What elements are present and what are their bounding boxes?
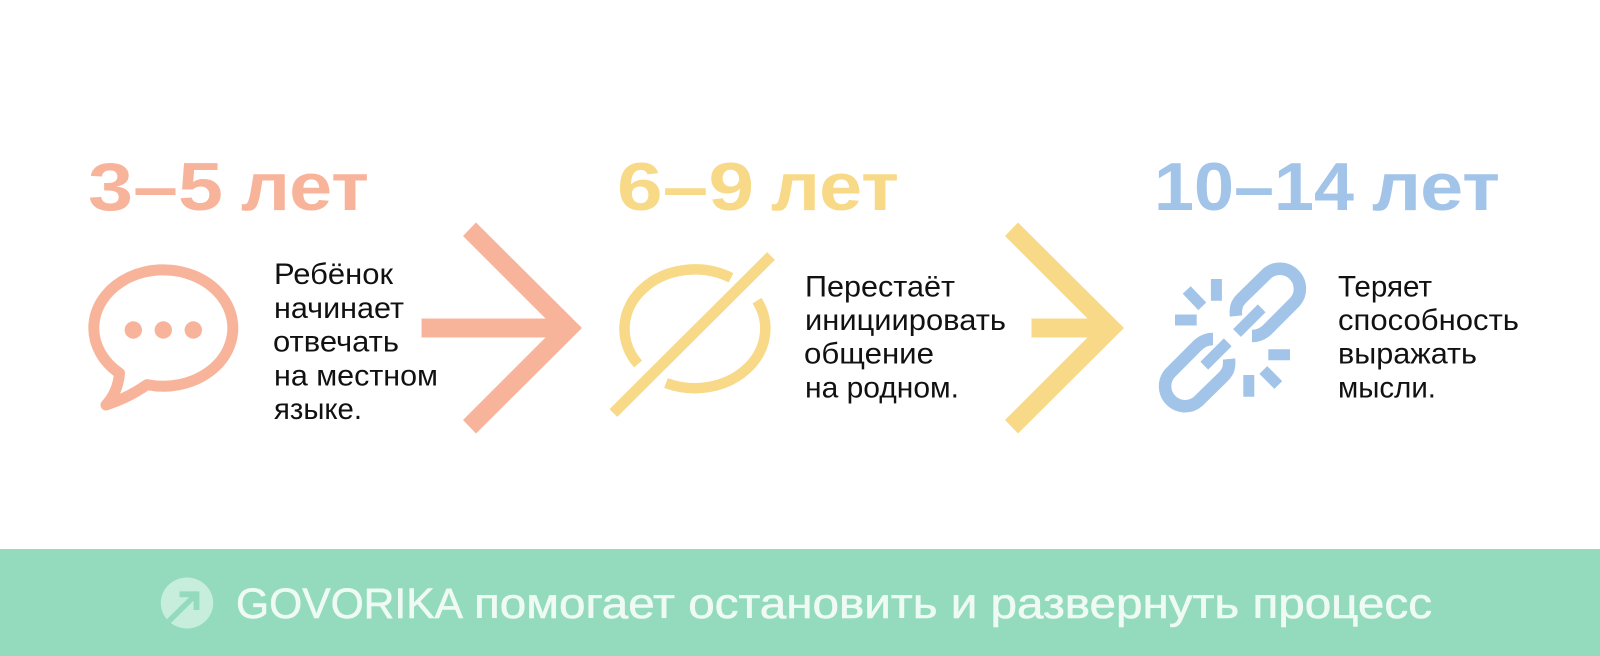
banner text: помогает остановить и развернуть процесс xyxy=(474,580,1432,628)
heading: 10-14 years: 10–14 xyxy=(1154,149,1354,225)
arrow: salmon xyxy=(422,222,582,434)
banner xyxy=(0,549,1600,656)
banner text: GOVORIKA xyxy=(236,580,463,628)
heading: 6-9 years: 6–9 xyxy=(617,149,754,225)
text block: loses ability: мысли. xyxy=(1338,372,1436,404)
text block: child starts answering xyxy=(273,258,438,426)
panel: 6-9 years xyxy=(613,149,1006,413)
text block: loses ability: способность xyxy=(1338,304,1519,337)
text block: loses ability xyxy=(1338,270,1519,404)
heading: 10-14 years: лет xyxy=(1372,149,1500,225)
text block: stops initiating: на родном. xyxy=(805,372,959,404)
icon: speech bubble xyxy=(94,270,233,405)
panel: 3-5 years xyxy=(88,149,438,426)
heading: 3-5 years xyxy=(88,149,369,225)
text block: loses ability: Теряет xyxy=(1338,270,1432,304)
icon: arrow in circle xyxy=(161,578,213,628)
text block: child starts answering: на местном xyxy=(274,360,438,392)
heading: 3-5 years: 3–5 xyxy=(88,149,223,225)
icon: broken chain xyxy=(1165,269,1300,406)
text block: stops initiating: инициировать xyxy=(805,304,1006,337)
panel: 10-14 years xyxy=(1154,149,1519,406)
arrow: yellow xyxy=(1005,222,1124,434)
heading: 6-9 years xyxy=(617,149,899,225)
heading: 10-14 years xyxy=(1154,149,1500,225)
heading: 3-5 years: лет xyxy=(241,149,369,225)
text block: child starts answering: языке. xyxy=(274,393,362,426)
text block: loses ability: выражать xyxy=(1338,338,1477,370)
text block: child starts answering: отвечать xyxy=(273,326,399,358)
text block: stops initiating xyxy=(804,270,1006,404)
icon: crossed circle xyxy=(613,256,771,413)
text block: stops initiating: общение xyxy=(804,338,934,370)
text block: child starts answering: начинает xyxy=(274,292,404,325)
heading: 6-9 years: лет xyxy=(771,149,899,225)
text block: child starts answering: Ребёнок xyxy=(274,258,394,291)
text block: stops initiating: Перестаёт xyxy=(805,270,955,304)
